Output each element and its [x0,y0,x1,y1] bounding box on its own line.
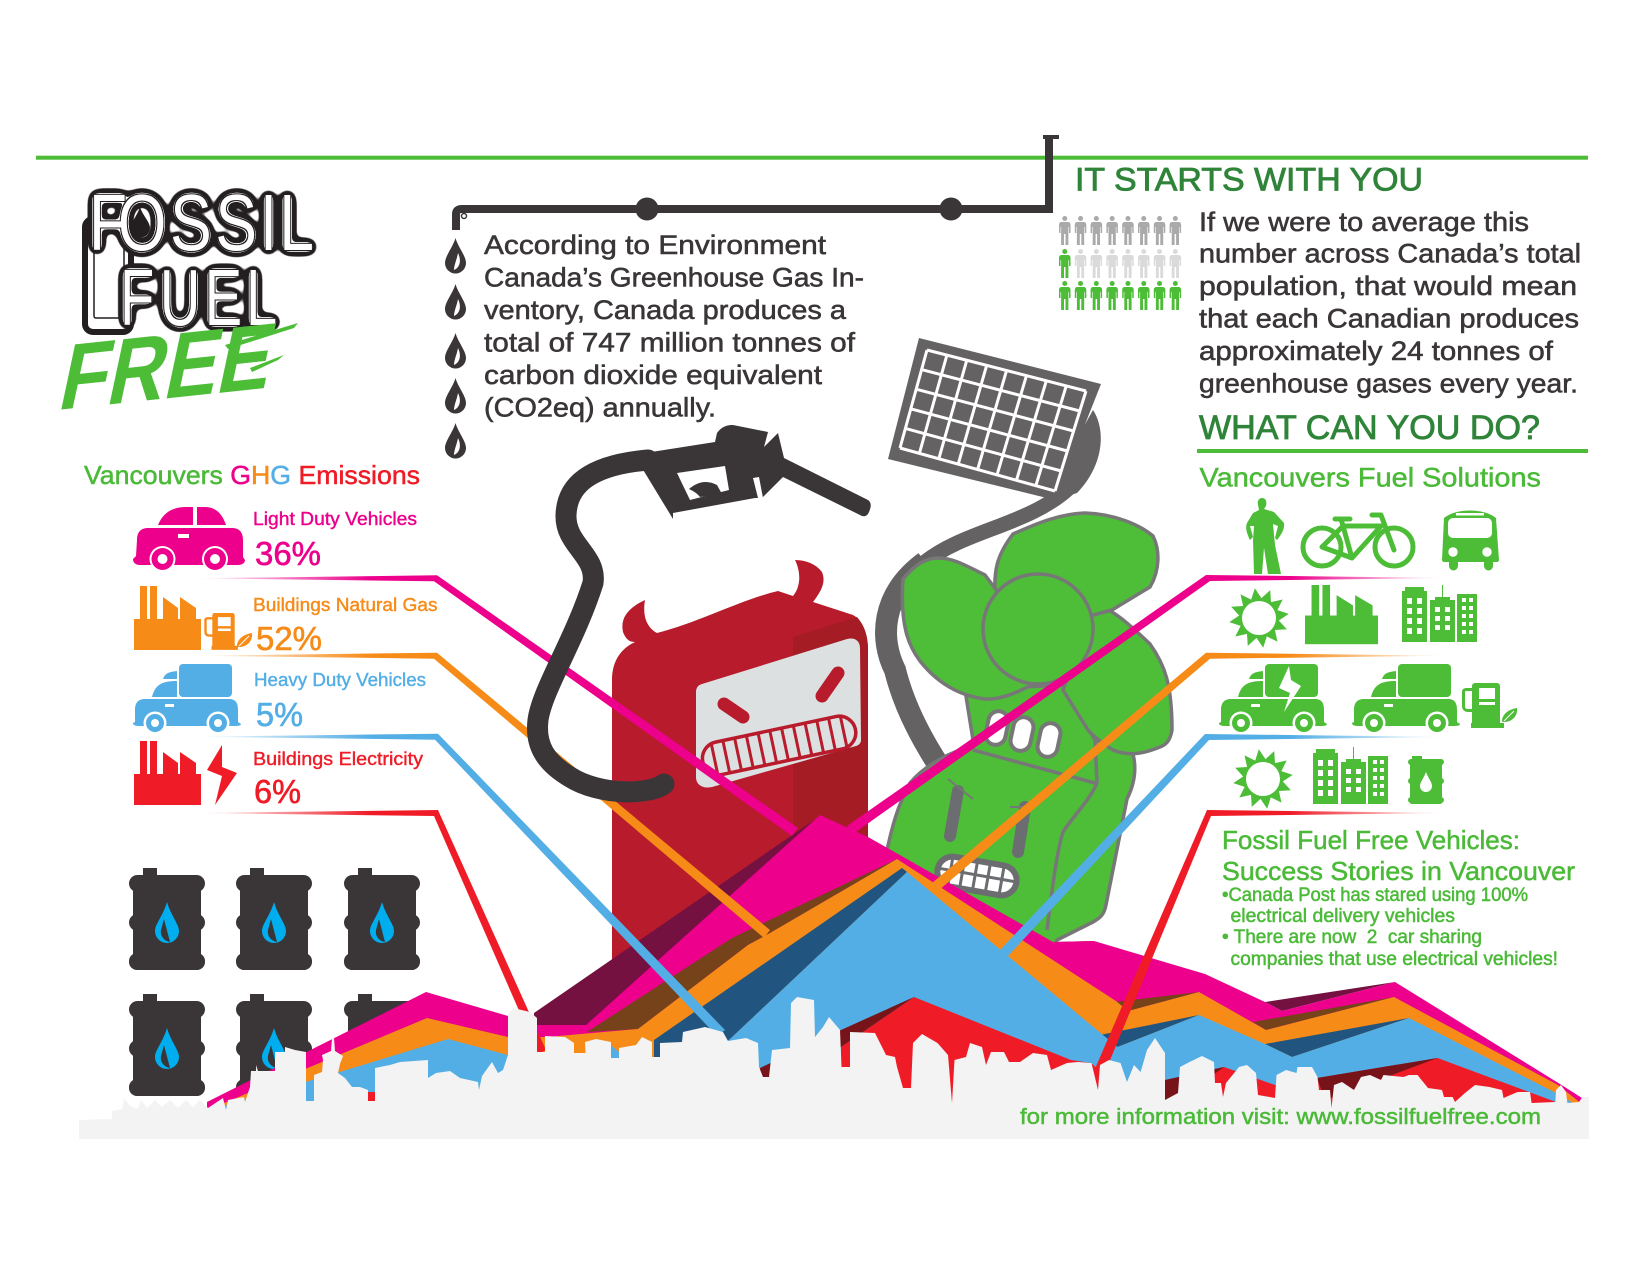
solar panel and cable [886,338,1101,775]
label: buildings electricity [253,749,423,810]
top leaf [995,513,1158,640]
heading: GHG emissions: Vancouvers GHG Emissions [84,460,420,490]
green solar character [880,513,1172,980]
logo drop [131,207,150,238]
center circle [983,574,1093,684]
blue layer [210,872,1582,1130]
label: buildings natural gas: Buildings Natural Gas [253,595,438,615]
solution icons row 4 [1229,745,1444,813]
success stories text [1222,825,1575,970]
logo word: Fuel: FUEL [120,252,277,342]
success stories text: electrical delivery vehicles [1230,906,1455,927]
left connector lines [195,575,798,1054]
intro paragraph: According to Environment [484,230,827,260]
heading: what can you do: WHAT CAN YOU DO? [1199,409,1540,447]
logo [52,179,314,431]
oil pipeline [456,135,1059,230]
success stories text: Success Stories in Vancouver [1222,856,1575,886]
success stories text: Fossil Fuel Free Vehicles: [1222,825,1520,855]
angry eyes [724,673,838,717]
can face plate [696,638,861,788]
label: heavy duty vehicles: 5% [256,696,303,733]
heading: it starts with you: IT STARTS WITH YOU [1075,162,1423,198]
average paragraph: greenhouse gases every year. [1199,369,1578,399]
intro paragraph [484,230,864,422]
grimace [699,713,859,778]
icon: red factory and bolt [134,741,237,805]
icon: orange factory and gas pump [134,586,252,650]
label: buildings electricity: 6% [254,773,301,810]
average paragraph: If we were to average this [1199,207,1529,237]
footer link: for more information visit: www.fossilfuelfree.com [1020,1104,1541,1129]
pink layer [207,815,1582,1120]
heading: fuel solutions: Vancouvers Fuel Solutions [1200,463,1541,493]
people pictogram [1059,216,1181,310]
label: heavy duty vehicles [254,670,426,733]
logo: fuel F stem [85,219,131,332]
logo word: Fossil: FOSSIL [89,179,314,268]
success stories text: companies that use electrical vehicles! [1230,949,1558,970]
success stories text: • There are now 2 car sharing [1222,927,1482,948]
average paragraph: that each Canadian produces [1199,304,1579,334]
label: light duty vehicles: Light Duty Vehicles [253,509,417,529]
oil drops column [445,238,466,458]
average paragraph: population, that would mean [1199,271,1577,301]
icon: pink car [133,507,245,572]
icon: person [1246,498,1284,574]
average paragraph: number across Canada’s total [1199,239,1581,269]
layered emissions mountain chart [207,815,1582,1130]
top green rule [36,156,1588,160]
intro paragraph: total of 747 million tonnes of [484,328,856,358]
orange layer [212,859,1582,1125]
dark blue shadows [654,868,1409,1065]
label: buildings natural gas: 52% [256,620,322,657]
logo word: Free: FREE [52,304,285,431]
average paragraph: approximately 24 tonnes of [1199,336,1554,366]
brown shadows [587,859,1394,1032]
intro paragraph: ventory, Canada produces a [484,295,846,325]
label: buildings natural gas [253,595,438,657]
gritted mouth [935,854,1019,898]
intro paragraph: Canada’s Greenhouse Gas In- [484,262,864,292]
Vancouver skyline [79,997,1589,1139]
label: light duty vehicles: 36% [255,535,321,572]
label: buildings electricity: Buildings Electricity [253,749,423,769]
icon: blue truck [133,664,241,734]
dark pink shadows [534,815,1395,1030]
right connector lines [847,575,1447,1082]
body [880,685,1135,980]
chest slots [984,709,1062,759]
fuel hose and nozzle [537,425,871,792]
left leaf [902,558,1040,699]
label: heavy duty vehicles: Heavy Duty Vehicles [254,670,426,690]
icon: bus [1442,510,1499,570]
intro paragraph: carbon dioxide equivalent [484,360,823,390]
label: light duty vehicles [253,509,417,572]
eyes [950,791,1025,852]
body seam [973,740,1097,930]
solution icons row 1 [1246,498,1499,574]
solution icons row 2 [1225,584,1477,652]
solution icons row 3 [1219,664,1517,734]
right leaf [1063,605,1172,754]
average paragraph [1199,207,1581,399]
red layer [362,997,1556,1125]
icon: bicycle [1303,515,1413,566]
oil barrels [129,868,420,1096]
red fuel can character [612,560,868,1000]
success stories text: •Canada Post has stared using 100% [1222,885,1528,906]
intro paragraph: (CO2eq) annually. [484,392,716,422]
